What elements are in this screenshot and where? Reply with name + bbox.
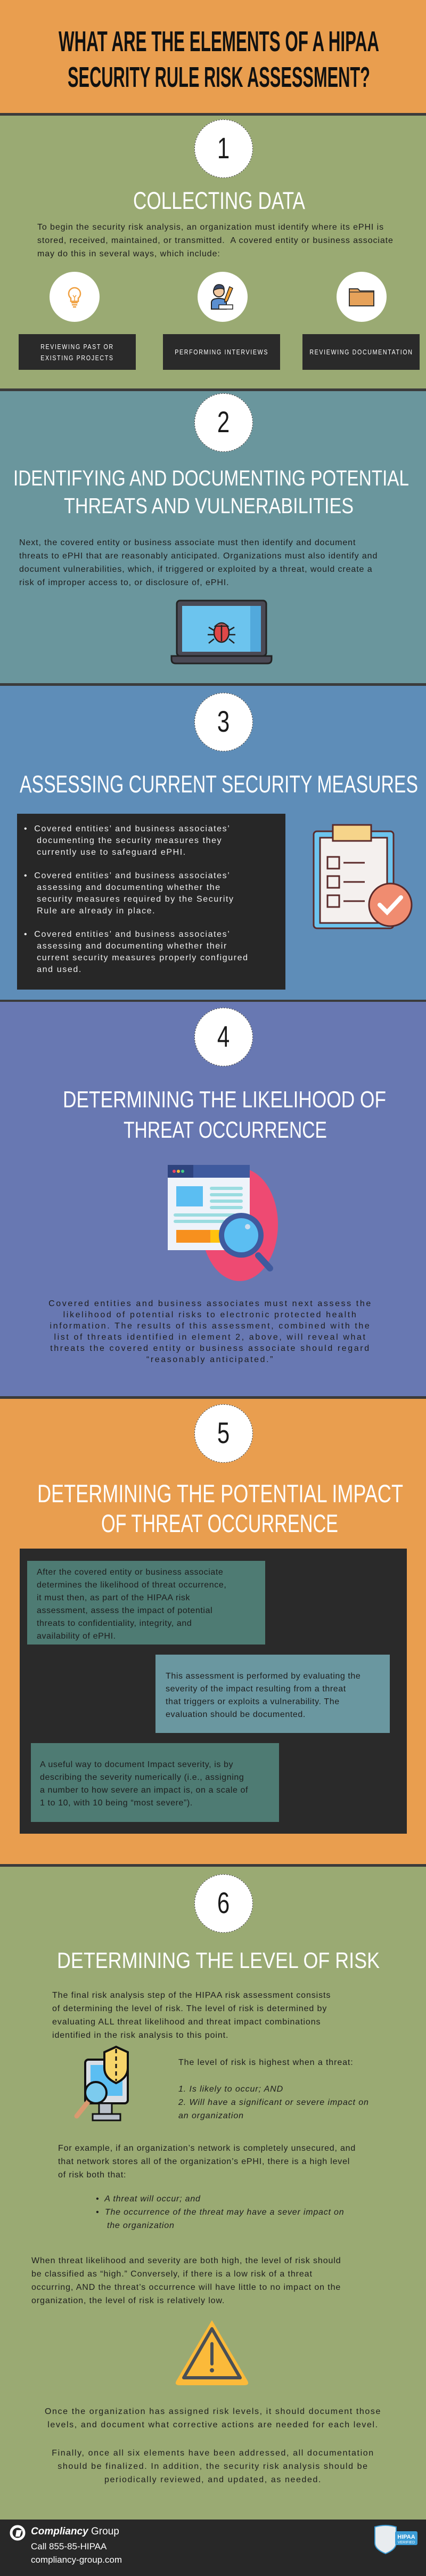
text: example bullets [96, 2194, 344, 2230]
callout: impact box 2: severity of the impact resulting from a threat [166, 1684, 346, 1694]
callout: impact box 2: This assessment is performed by evaluating the [166, 1672, 361, 1681]
icon: monitor with shield and magnifier [75, 2045, 129, 2121]
text: highest risk conditions [178, 2058, 369, 2120]
text: classification: organization, the level of risk is relatively low. [31, 2296, 225, 2305]
text: section 6 intro: of determining the level of risk. The level of risk is determined by [52, 2004, 327, 2013]
number circle 5 [194, 1404, 253, 1463]
text: finally [52, 2449, 374, 2484]
number circle 3 [194, 693, 253, 751]
icon: lightbulb [50, 272, 100, 322]
text: bullets: • Covered entities’ and business associates’ [24, 930, 230, 939]
callout: impact box 3: A useful way to document Impact severity, is by [40, 1760, 233, 1769]
icon: interview person [198, 272, 248, 322]
heading: level of risk: DETERMINING THE LEVEL OF RISK [57, 1948, 380, 1973]
callout: impact box 1: threats to confidentiality, integrity, and [37, 1619, 192, 1628]
callout: impact box 2: that triggers or exploits a vulnerability. The [166, 1697, 340, 1706]
icon: folder [337, 272, 387, 322]
logo: compliancy group: Compliancy Group [31, 2526, 119, 2537]
text: section 2 body [19, 538, 378, 587]
text: section 4 body: information. The results of this assessment, combined with the [50, 1322, 371, 1331]
text: highest risk conditions: 1. Is likely to occur; AND [178, 2085, 283, 2094]
text: bullets [24, 824, 249, 974]
panel: section 6 level of risk [0, 1867, 426, 2520]
text: highest risk conditions: The level of risk is highest when a threat: [178, 2058, 354, 2067]
text: example: of risk both that: [58, 2170, 126, 2180]
number circle 4 [194, 1008, 253, 1066]
text: example bullets: the organization [107, 2221, 175, 2230]
icon: warning triangle [176, 2320, 248, 2385]
heading: identifying threats [13, 466, 409, 517]
text: section 4 body: list of threats identified in element 2, above, will reveal what [54, 1333, 367, 1342]
text: bullets: • Covered entities’ and business associates’ [24, 871, 230, 880]
badge: hipaa verified [374, 2525, 417, 2554]
text: example [58, 2144, 356, 2180]
text: finally: Finally, once all six elements have been addressed, all documentation [52, 2449, 374, 2458]
box: reviewing past projects [19, 334, 136, 370]
number circle 6: 6 [217, 1886, 230, 1919]
box: reviewing documentation: REVIEWING DOCUMENTATION [309, 348, 413, 356]
text: classification [31, 2256, 341, 2305]
callout: impact box 3: 1 to 10, with 10 being “most severe”). [40, 1799, 193, 1808]
icon: browser with magnifier [168, 1165, 278, 1281]
panel: bullet list box [17, 814, 285, 990]
text: bullets: assessing and documenting whether their [37, 942, 227, 951]
number circle 2 [194, 393, 253, 452]
text: section 1 intro [37, 223, 394, 258]
text: section 1 intro: stored, received, maintained, or transmitted. A covered entity or business associate [37, 236, 394, 245]
panel: section 4 likelihood [0, 1002, 426, 1396]
text: bullets: • Covered entities’ and business associates’ [24, 824, 230, 833]
text: bullets: current security measures properly configured [37, 953, 249, 962]
text: classification: When threat likelihood and severity are both high, the level of risk should [31, 2256, 341, 2265]
callout: impact box 1: it must then, as part of the HIPAA risk [37, 1593, 190, 1602]
text: section 4 body: Covered entities and business associates must next assess the [48, 1299, 372, 1308]
text: finally: periodically reviewed, and updated, as needed. [104, 2475, 322, 2484]
text: bullets: Rule are already in place. [37, 906, 155, 916]
box: reviewing past projects: EXISTING PROJECTS [40, 354, 114, 361]
badge: hipaa verified: VERIFIED [398, 2541, 415, 2545]
callout: impact box 2: evaluation should be documented. [166, 1710, 306, 1719]
box: reviewing past projects: REVIEWING PAST OR [40, 342, 114, 351]
box: reviewing documentation [302, 334, 420, 370]
text: contact: compliancy-group.com [31, 2555, 122, 2565]
text: highest risk conditions: 2. Will have a significant or severe impact on [178, 2098, 369, 2107]
text: example bullets: • The occurrence of the threat may have a sever impact on [96, 2208, 344, 2217]
callout: impact box 3: describing the severity numerically (i.e., assigning [40, 1773, 244, 1782]
box: performing interviews: PERFORMING INTERVIEWS [175, 348, 268, 356]
callout: impact box 1: assessment, assess the impact of potential [37, 1606, 212, 1615]
number circle 5: 5 [217, 1416, 230, 1449]
text: section 4 body [48, 1299, 372, 1364]
text: section 6 intro: The final risk analysis step of the HIPAA risk assessment consists [52, 1991, 331, 2000]
text: section 4 body: “reasonably anticipated.” [146, 1355, 274, 1364]
footer [0, 2520, 426, 2576]
icon: clipboard checklist [313, 824, 412, 929]
box: performing interviews [163, 334, 280, 370]
logo: compliancy group [10, 2525, 119, 2541]
panel: impact dark box [20, 1549, 407, 1834]
text: section 2 body: Next, the covered entity or business associate must then identify and document [19, 538, 356, 547]
callout: impact box 3: a number to how severe an impact is, on a scale of [40, 1786, 248, 1795]
text: document levels: levels, and document what corrective actions are needed for each level. [47, 2420, 379, 2429]
callout: impact box 1: availability of ePHI. [37, 1632, 116, 1641]
text: contact: Call 855-85-HIPAA [31, 2541, 106, 2551]
text: example: that network stores all of the organization’s ePHI, there is a high level [58, 2157, 350, 2166]
text: document levels [45, 2407, 381, 2429]
text: section 1 intro: may do this in several ways, which include: [37, 249, 220, 258]
panel: section 3 security measures [0, 686, 426, 1000]
heading: determining likelihood [63, 1087, 386, 1140]
text: section 6 intro: evaluating ALL threat likelihood and threat impact combinations [52, 2018, 321, 2027]
text: section 1 intro: To begin the security risk analysis, an organization must identify where its ePHI is [37, 223, 384, 232]
text: example bullets: • A threat will occur; and [96, 2194, 201, 2204]
heading: potential impact [37, 1479, 403, 1535]
callout: impact box 1: determines the likelihood of threat occurrence, [37, 1581, 226, 1590]
text: section 2 body: risk of improper access to, or disclosure of, ePHI. [19, 578, 229, 587]
panel: section 1 collecting data [0, 116, 426, 388]
header band [0, 0, 426, 113]
text: section 6 intro: identified in the risk analysis to this point. [52, 2031, 228, 2040]
number circle 4: 4 [217, 1019, 230, 1053]
number circle 1: 1 [217, 131, 230, 165]
text: contact [31, 2541, 122, 2565]
text: classification: be classified as “high.” Conversely, if there is a low risk of a threat [31, 2270, 313, 2279]
text: section 6 intro [52, 1991, 331, 2040]
number circle 6 [194, 1874, 253, 1933]
text: example: For example, if an organization’s network is completely unsecured, and [58, 2144, 356, 2153]
badge: hipaa verified: HIPAA [397, 2534, 415, 2540]
text: finally: should be finalized. In addition, the security risk analysis should be [58, 2462, 368, 2471]
text: bullets: security measures required by the Security [37, 895, 234, 904]
icon: laptop with bug [170, 600, 273, 664]
text: bullets: currently use to safeguard ePHI. [37, 848, 186, 857]
callout: impact box 1 [27, 1561, 265, 1645]
number circle 1 [194, 119, 253, 178]
number circle 2: 2 [217, 405, 230, 439]
text: section 4 body: threats the covered entity or business associate should regard [50, 1344, 371, 1353]
callout: impact box 3 [31, 1743, 279, 1822]
callout: impact box 2 [155, 1655, 390, 1733]
callout: impact box 1: After the covered entity or business associate [37, 1568, 223, 1577]
number circle 3: 3 [217, 704, 230, 738]
text: section 4 body: likelihood of potential risks to electronic protected health [63, 1310, 357, 1319]
text: bullets: documenting the security measures they [37, 836, 222, 845]
text: bullets: and used. [37, 965, 82, 974]
title [59, 26, 379, 93]
text: document levels: Once the organization has assigned risk levels, it should document those [45, 2407, 381, 2416]
text: section 2 body: threats to ePHI that are reasonably anticipated. Organizations must also identify and [19, 552, 378, 561]
text: section 2 body: document vulnerabilities, which, if triggered or exploited by a threat, would create a [19, 565, 373, 574]
panel: section 5 impact [0, 1399, 426, 1864]
text: bullets: assessing and documenting whether the [37, 883, 221, 892]
text: highest risk conditions: an organization [178, 2111, 244, 2120]
text: classification: occurring, AND the threat’s occurrence will have little to no impact on the [31, 2283, 341, 2292]
panel: section 2 threats [0, 391, 426, 683]
